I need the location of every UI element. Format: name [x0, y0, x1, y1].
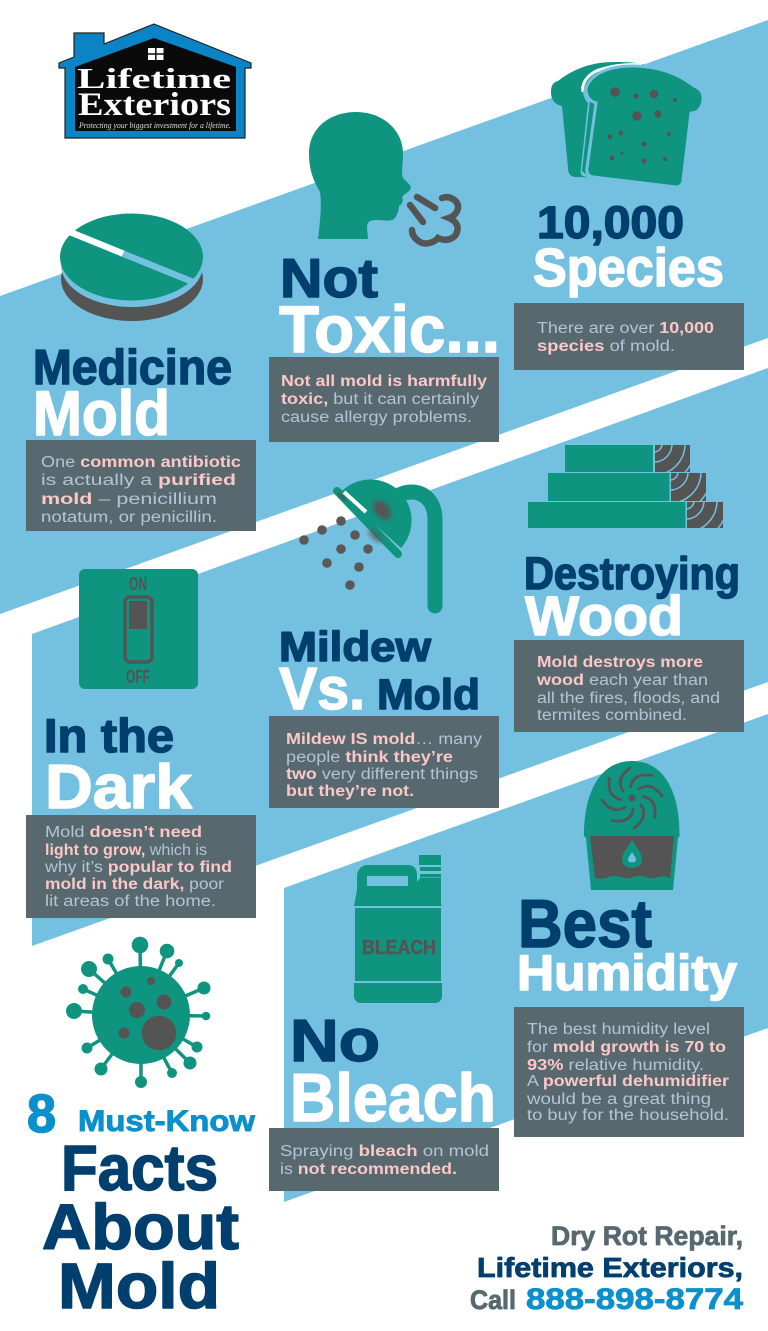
icon: pill: [60, 214, 203, 321]
panel: species text: [514, 303, 744, 370]
title: 8 Must-Know Facts About Mold: [27, 1084, 256, 1322]
panel: mildew text: Mildew IS mold … many: [286, 731, 482, 748]
heading: Mildew Vs. Mold: Mildew: [279, 623, 431, 670]
heading: 10,000 Species: 10,000: [537, 197, 684, 248]
panel: humidity text: for mold growth is 70 to: [527, 1039, 726, 1056]
logo: Lifetime Exteriors: Exteriors: [78, 87, 231, 123]
panel: bleach text: is not recommended.: [280, 1161, 457, 1178]
footer: call to action: Dry Rot Repair,: [551, 1221, 743, 1251]
panel: dark text: Mold doesn’t need: [45, 824, 202, 841]
heading: Best Humidity: Best: [518, 886, 652, 962]
heading: Medicine Mold: [33, 341, 232, 449]
panel: dark text: [26, 815, 256, 918]
title: 8 Must-Know Facts About Mold: 8: [27, 1084, 56, 1144]
icon: moldy bread: [551, 62, 703, 187]
panel: species text: There are over 10,000: [537, 320, 714, 337]
footer: call to action: Lifetime Exteriors,: [477, 1252, 743, 1283]
heading: No Bleach: No: [290, 1008, 380, 1074]
panel: bleach text: [269, 1128, 499, 1191]
panel: wood text: wood each year than: [536, 672, 708, 689]
title: 8 Must-Know Facts About Mold: Must-Know: [78, 1105, 256, 1138]
panel: humidity text: would be a great thing: [526, 1091, 711, 1108]
footer: call to action: [470, 1221, 743, 1316]
panel: humidity text: to buy for the household.: [527, 1107, 729, 1124]
icon: light switch: ON: [129, 574, 147, 594]
heading: Mildew Vs. Mold: Vs.: [279, 656, 365, 722]
panel: medicine mold text: notatum, or penicillin.: [41, 509, 217, 526]
panel: humidity text: [514, 1007, 744, 1137]
heading: Not Toxic...: Toxic...: [279, 292, 500, 366]
panel: not toxic text: cause allergy problems.: [281, 409, 472, 426]
heading: 10,000 Species: [533, 197, 724, 298]
panel: wood text: termites combined.: [537, 707, 687, 724]
panel: medicine mold text: mold – penicillium: [41, 491, 217, 508]
icon: bleach jug: BLEACH: [362, 937, 436, 959]
panel: wood text: Mold destroys more: [537, 654, 703, 671]
heading: Medicine Mold: Mold: [33, 379, 170, 449]
panel: species text: species of mold.: [537, 338, 675, 355]
icon: dehumidifier: [584, 761, 680, 890]
panel: not toxic text: Not all mold is harmfully: [281, 373, 487, 390]
panel: mildew text: people think they’re: [286, 749, 453, 766]
heading: In the Dark: Dark: [45, 753, 193, 822]
panel: mildew text: [269, 716, 499, 808]
logo: Lifetime Exteriors: Lifetime: [77, 63, 231, 95]
panel: dark text: light to grow, which is: [45, 842, 207, 859]
logo: Lifetime Exteriors: Protecting your biggest investment for a lifetime.: [78, 121, 231, 130]
icon: bleach jug: [354, 855, 442, 1003]
heading: Best Humidity: [517, 886, 737, 1001]
panel: medicine mold text: [26, 440, 256, 531]
footer: call to action: Call: [470, 1285, 516, 1315]
panel: dark text: mold in the dark, poor: [45, 876, 224, 893]
heading: No Bleach: Bleach: [290, 1060, 496, 1136]
panel: humidity text: The best humidity level: [527, 1021, 710, 1038]
panel: mildew text: but they’re not.: [286, 783, 414, 800]
panel: wood text: [514, 640, 744, 732]
panel: medicine mold text: is actually a purified: [41, 472, 236, 489]
title: 8 Must-Know Facts About Mold: Mold: [58, 1250, 220, 1322]
heading: Mildew Vs. Mold: Mold: [377, 671, 480, 719]
panel: medicine mold text: One common antibiotic: [41, 454, 241, 471]
title: 8 Must-Know Facts About Mold: About: [42, 1191, 239, 1263]
panel: wood text: all the fires, floods, and: [537, 690, 720, 707]
heading: Destroying Wood: Wood: [525, 584, 683, 647]
panel: mildew text: two very different things: [286, 766, 478, 783]
icon: light switch: [79, 569, 198, 689]
panel: humidity text: A powerful dehumidifier: [527, 1073, 729, 1090]
panel: dark text: lit areas of the home.: [45, 893, 216, 910]
icon: mold spore: [66, 937, 210, 1088]
heading: Not Toxic...: [279, 247, 500, 366]
heading: In the Dark: In the: [44, 709, 174, 762]
panel: humidity text: 93% relative humidity.: [527, 1057, 704, 1074]
footer: call to action: 888-898-8774: [526, 1283, 743, 1316]
heading: Medicine Mold: Medicine: [33, 341, 232, 395]
heading: Not Toxic...: Not: [280, 247, 378, 309]
icon: shower head: [299, 479, 435, 606]
panel: bleach text: Spraying bleach on mold: [280, 1143, 489, 1160]
icon: wood planks: [528, 445, 723, 528]
heading: In the Dark: [44, 709, 193, 822]
title: 8 Must-Know Facts About Mold: Facts: [61, 1132, 218, 1204]
icon: light switch: OFF: [126, 667, 150, 687]
panel: not toxic text: toxic, but it can certainly: [281, 391, 479, 408]
icon: head breathing spores: [309, 112, 458, 243]
heading: No Bleach: [290, 1008, 496, 1136]
heading: Best Humidity: Humidity: [517, 945, 737, 1001]
heading: Destroying Wood: Destroying: [524, 548, 740, 599]
heading: Mildew Vs. Mold: [279, 623, 480, 722]
panel: dark text: why it’s popular to find: [44, 859, 232, 876]
panel: not toxic text: [269, 357, 499, 442]
heading: 10,000 Species: Species: [533, 238, 724, 298]
heading: Destroying Wood: [524, 548, 740, 647]
logo: Lifetime Exteriors: [59, 24, 251, 138]
